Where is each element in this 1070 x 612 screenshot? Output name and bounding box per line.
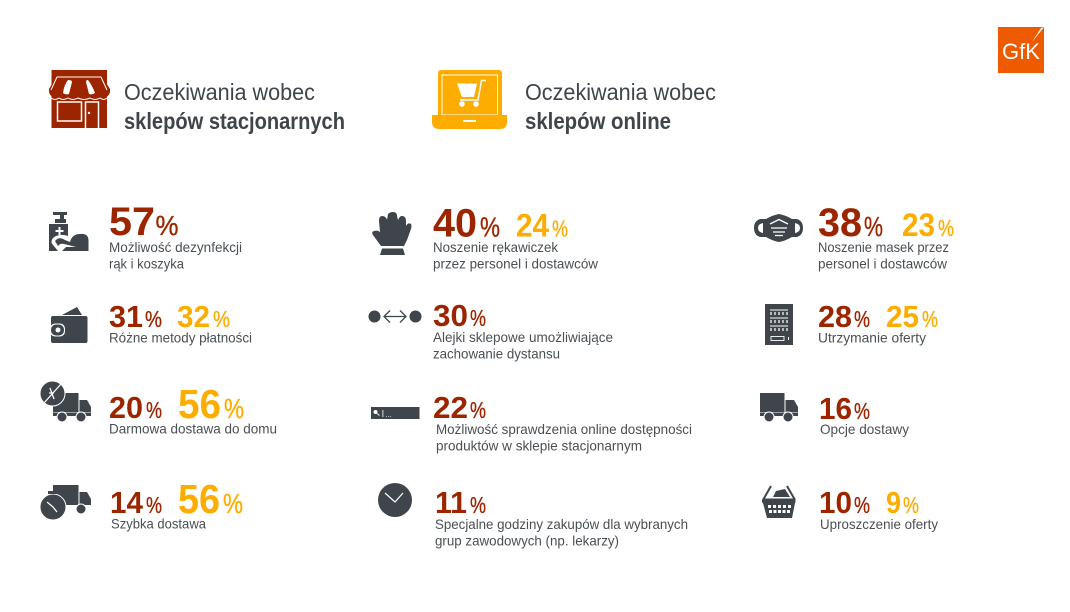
stat: special hours: 11	[435, 485, 467, 520]
stat: fast delivery: 14	[110, 485, 144, 520]
stat: gloves: przez personel i dostawców	[433, 256, 599, 272]
stat: masks: 23	[902, 207, 935, 243]
stat: masks: %	[938, 215, 954, 241]
stat: free delivery: %	[224, 393, 244, 424]
stat: simplified offer: 10	[819, 485, 852, 520]
stat: maintaining offer: 28	[818, 299, 852, 334]
stat: fast delivery: 56	[178, 476, 220, 522]
stat: masks	[818, 201, 954, 272]
stat: free delivery: %	[146, 397, 162, 423]
stat: delivery options: 16	[819, 391, 852, 426]
stat: free delivery	[109, 381, 277, 436]
stat: maintaining offer: %	[922, 306, 938, 332]
icon: face mask	[754, 214, 803, 242]
stat: gloves: %	[480, 212, 500, 242]
stat: payment methods: Różne metody płatności	[109, 330, 252, 346]
icon: vending machine	[765, 304, 793, 345]
stat: delivery options: %	[854, 398, 870, 424]
heading: online expectations: Oczekiwania wobec	[525, 79, 716, 105]
stat: payment methods: 32	[177, 299, 210, 334]
stat: store aisles distance	[433, 298, 613, 362]
stat: disinfection: %	[156, 210, 178, 241]
icon: shopping basket	[762, 486, 796, 518]
stat: masks: %	[864, 211, 883, 242]
stat: disinfection: 57	[109, 200, 155, 244]
logo: GfK: GfK	[1002, 39, 1040, 64]
stat: store aisles distance: %	[470, 305, 486, 331]
stat: special hours: Specjalne godziny zakupów dla wybranych	[435, 516, 688, 532]
stat: maintaining offer: Utrzymanie oferty	[818, 330, 926, 346]
stat: fast delivery: Szybka dostawa	[111, 516, 206, 532]
stat: masks: 38	[818, 201, 862, 245]
heading: in-store expectations	[124, 79, 345, 134]
icon: search bar	[371, 407, 420, 419]
stat: simplified offer: 9	[886, 485, 901, 520]
icon: fast delivery stopwatch truck	[40, 485, 91, 520]
icon: wallet	[50, 307, 88, 343]
stat: simplified offer: Uproszczenie oferty	[820, 516, 938, 532]
stat: disinfection: Możliwość dezynfekcji	[109, 239, 242, 255]
stat: special hours: grup zawodowych (np. lekarzy)	[435, 532, 619, 548]
icon: delivery truck	[760, 393, 798, 422]
stat: delivery options: Opcje dostawy	[820, 421, 909, 437]
stat: gloves: 40	[433, 202, 477, 246]
stat: payment methods: %	[213, 306, 230, 332]
stat: gloves: %	[552, 216, 568, 242]
icon: hand sanitizer	[49, 212, 88, 251]
stat: payment methods	[109, 299, 252, 346]
stat: delivery options	[819, 391, 909, 437]
stat: simplified offer: %	[903, 492, 919, 518]
stat: fast delivery: %	[146, 492, 162, 518]
stat: online availability check: %	[470, 397, 486, 423]
stat: maintaining offer	[818, 299, 938, 346]
icon: clock	[378, 483, 412, 517]
icon: distance arrows	[368, 310, 422, 322]
stat: online availability check: produktów w sklepie stacjonarnym	[436, 438, 642, 454]
stat: payment methods: 31	[109, 299, 143, 334]
stat: special hours: %	[470, 492, 486, 518]
stat: fast delivery	[110, 476, 243, 532]
heading: online expectations	[525, 79, 716, 134]
heading: in-store expectations: sklepów stacjonarnych	[124, 108, 345, 134]
stat: gloves	[433, 202, 599, 272]
stat: online availability check: 22	[433, 390, 468, 425]
stat: gloves: 24	[516, 208, 549, 244]
stat: payment methods: %	[145, 306, 162, 332]
stat: simplified offer: %	[854, 492, 870, 518]
stat: masks: personel i dostawców	[818, 256, 948, 272]
icon: free delivery truck	[40, 381, 91, 422]
stat: disinfection	[109, 200, 242, 272]
stat: store aisles distance: zachowanie dystansu	[433, 346, 560, 362]
stat: store aisles distance: 30	[433, 298, 468, 333]
stat: simplified offer	[819, 485, 938, 532]
stat: online availability check	[433, 390, 692, 454]
heading: online expectations: sklepów online	[525, 108, 671, 134]
stat: maintaining offer: %	[854, 306, 870, 332]
icon: glove	[372, 212, 412, 255]
stat: gloves: Noszenie rękawiczek	[433, 239, 559, 255]
stat: fast delivery: %	[223, 488, 243, 519]
stat: disinfection: rąk i koszyka	[109, 256, 184, 272]
heading: in-store expectations: Oczekiwania wobec	[124, 79, 315, 105]
stat: store aisles distance: Alejki sklepowe umożliwiające	[433, 329, 613, 345]
stat: masks: Noszenie masek przez	[818, 239, 949, 255]
logo: GfK	[998, 27, 1044, 73]
stat: online availability check: Możliwość sprawdzenia online dostępności	[436, 421, 692, 437]
stat: free delivery: 20	[109, 390, 143, 425]
stat: free delivery: 56	[178, 381, 221, 427]
stat: special hours	[435, 485, 688, 548]
icon: store front	[49, 70, 110, 128]
icon: laptop with cart	[432, 70, 507, 129]
stat: maintaining offer: 25	[886, 299, 919, 334]
stat: free delivery: Darmowa dostawa do domu	[109, 420, 277, 436]
